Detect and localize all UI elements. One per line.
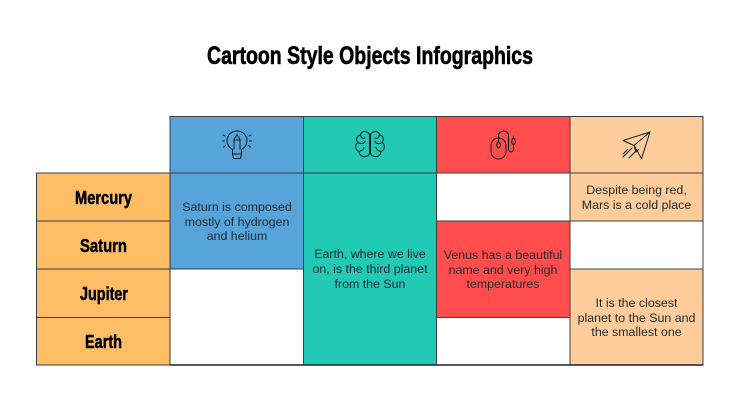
row label: Mercury: Mercury [75, 188, 132, 208]
cell: Venus text block [436, 221, 570, 318]
title: Cartoon Style Objects Infographics [207, 42, 533, 70]
icon: light bulb with pencil [222, 131, 252, 158]
cell: Mercury text block [570, 269, 703, 365]
cell: Mars text block: Despite being red, [586, 183, 687, 197]
cell: Earth text block [304, 173, 436, 365]
cell: empty red top [436, 173, 570, 221]
row label: Earth: Earth [85, 332, 122, 352]
row label: Saturn [36, 221, 170, 269]
cell: empty peach [570, 221, 703, 269]
header: blue with light bulb [170, 116, 304, 173]
cell: Venus text block: Venus has a beautiful [444, 248, 562, 262]
cell: Mercury text block: It is the closest [596, 296, 678, 310]
row label: Saturn: Saturn [80, 236, 127, 256]
header: red with mouse [436, 116, 570, 173]
panel: blue column [170, 116, 304, 365]
header: teal with brain [304, 116, 436, 173]
cell: Earth text block: Earth, where we live [314, 247, 426, 261]
row label: Jupiter [36, 269, 170, 318]
cell: Saturn text block: Saturn is composed [182, 200, 292, 214]
panel: red column [436, 116, 570, 365]
cell: Venus text block: name and very high [449, 263, 558, 277]
row label: Mercury [36, 173, 170, 221]
panel: planet row labels [36, 173, 170, 365]
cell: Earth text block: on, is the third planet [312, 262, 428, 276]
row label: Jupiter: Jupiter [80, 284, 128, 304]
header: peach with paper plane [570, 116, 703, 173]
cell: Saturn text block: mostly of hydrogen [185, 215, 289, 229]
cell: Saturn text block [170, 173, 304, 269]
row label: Earth [36, 318, 170, 365]
cell: empty red bottom [436, 318, 570, 365]
cell: Mercury text block: the smallest one [591, 325, 682, 339]
panel: teal column [304, 116, 436, 365]
cell: empty blue column [170, 269, 304, 365]
panel: peach column [570, 116, 703, 365]
cell: Mercury text block: planet to the Sun and [578, 311, 696, 325]
icon: paper plane [623, 132, 650, 158]
cell: Earth text block: from the Sun [335, 277, 406, 291]
icon: brain [356, 131, 384, 157]
cell: Saturn text block: and helium [207, 229, 267, 243]
icon: computer mouse [491, 131, 515, 159]
cell: Mars text block [570, 173, 703, 221]
cell: Mars text block: Mars is a cold place [582, 198, 691, 212]
cell: Venus text block: temperatures [466, 277, 540, 291]
